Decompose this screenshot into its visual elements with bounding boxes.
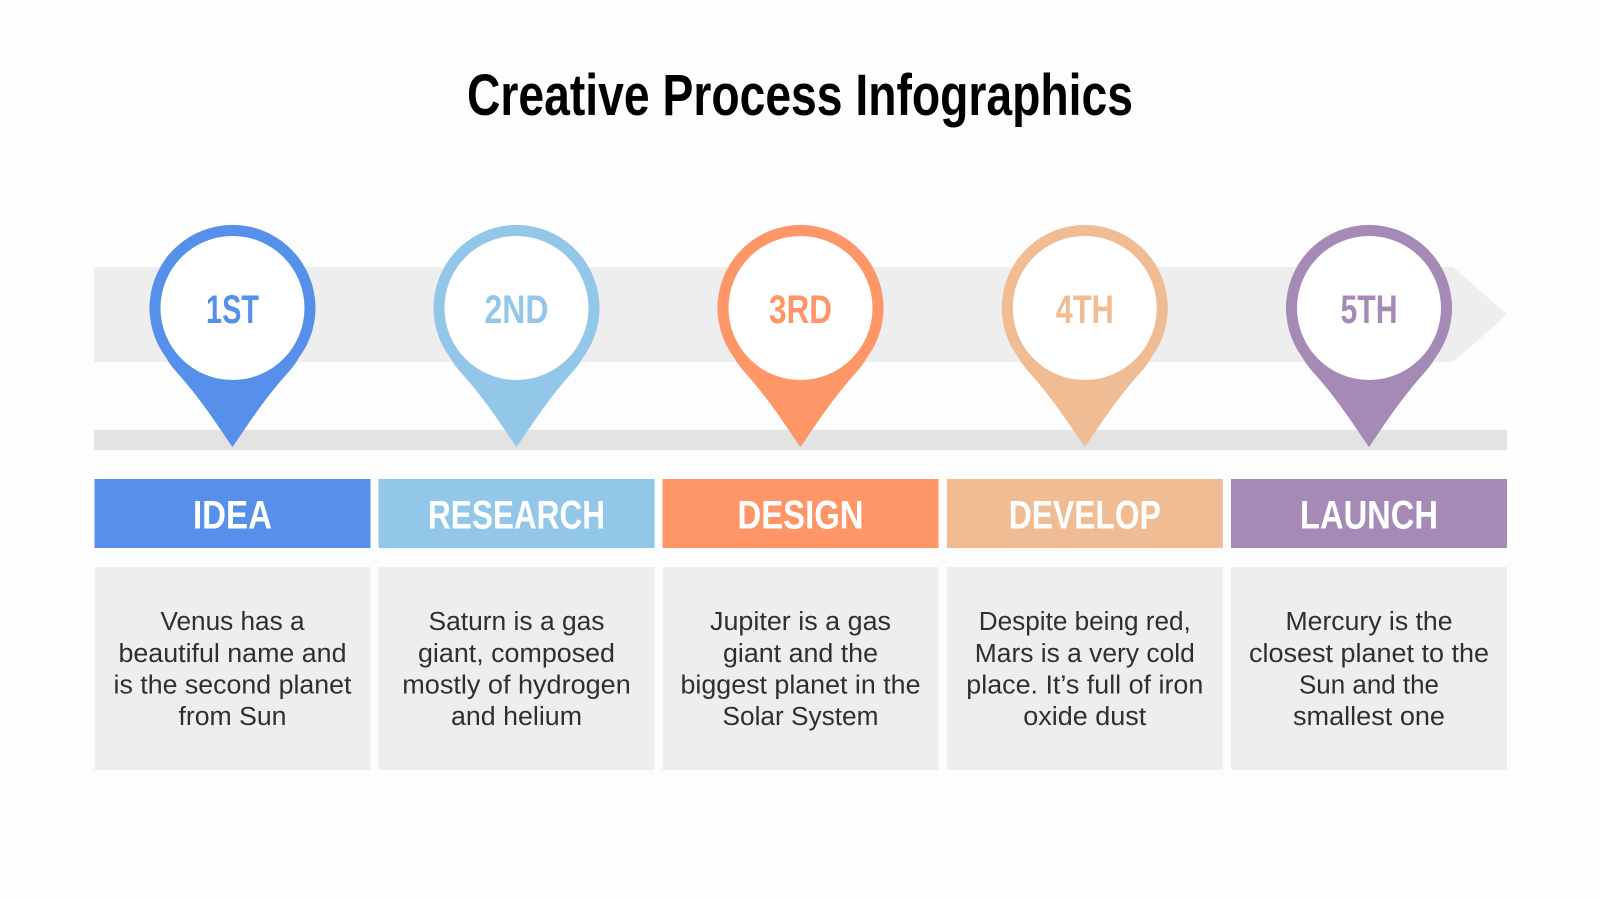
text card: idea: beautiful name and [118,640,346,668]
step 1: idea [94,225,370,770]
text card: launch: Sun and the [1299,672,1439,700]
header: design [662,479,938,548]
text card: develop: Mars is a very cold [975,640,1195,668]
text card: develop: oxide dust [1023,703,1146,731]
header: launch: LAUNCH [1300,494,1438,538]
text card: research [378,567,654,770]
text card: research: giant, composed [418,640,615,668]
text card: design [662,567,938,770]
text card: launch [1231,567,1507,770]
icon: pin 1st: 1ST [206,288,259,332]
icon: pin 2nd [434,225,600,447]
icon: pin 5th: 5TH [1341,288,1397,332]
title: Creative Process Infographics [467,63,1133,128]
icon: pin 3rd [718,225,884,447]
header: idea: IDEA [193,494,272,538]
text card: launch: Mercury is the [1286,608,1452,636]
text card: launch: closest planet to the [1249,640,1489,668]
text card: idea: is the second planet [114,672,352,700]
text card: develop: place. It’s full of iron [966,672,1203,700]
header: research [378,479,654,548]
text card: design: biggest planet in the [680,672,920,700]
text card: research: mostly of hydrogen [402,672,631,700]
icon: pin 1st [150,225,316,447]
icon: pin 4th: 4TH [1056,288,1114,332]
timeline arrow band [94,267,1507,362]
text card: idea [94,567,370,770]
text card: develop: Despite being red, [979,608,1191,636]
text card: idea: Venus has a [160,608,305,636]
baseline bar [94,430,1507,450]
header: develop [947,479,1223,548]
header: research: RESEARCH [428,494,605,538]
text card: design: Solar System [722,703,878,731]
icon: pin 3rd: 3RD [769,288,832,332]
header: launch [1231,479,1507,548]
text card: design: Jupiter is a gas [710,608,891,636]
step 3: design [662,225,938,770]
header: design: DESIGN [738,494,864,538]
icon: pin 2nd: 2ND [484,288,548,332]
text card: research: Saturn is a gas [428,608,604,636]
step 5: launch [1231,225,1507,770]
step 4: develop [947,225,1223,770]
text card: launch: smallest one [1293,703,1445,731]
icon: pin 5th [1286,225,1452,447]
header: develop: DEVELOP [1009,494,1161,538]
text card: research: and helium [451,703,582,731]
text card: design: giant and the [723,640,878,668]
step 2: research [378,225,654,770]
text card: idea: from Sun [178,703,286,731]
icon: pin 4th [1002,225,1168,447]
header: idea [94,479,370,548]
text card: develop [947,567,1223,770]
